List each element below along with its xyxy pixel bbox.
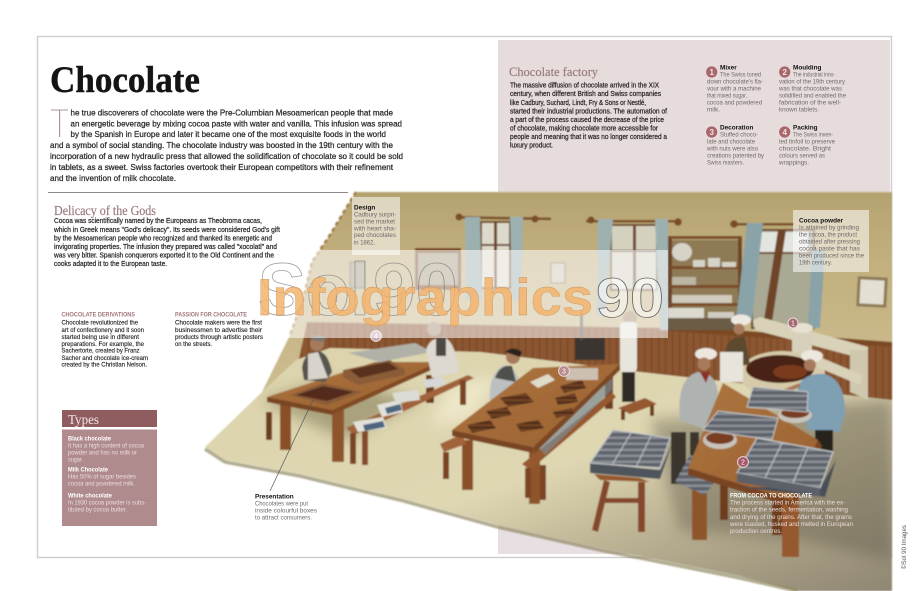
text block: passion for chocolate: products through artistic posters — [175, 334, 263, 341]
illustration: chocolate factory scene — [205, 192, 892, 591]
callout: cocoa powder: cocoa paste that has — [799, 246, 860, 252]
centre worktable — [440, 364, 620, 504]
watermark veil — [258, 250, 668, 338]
text block: passion for chocolate: businessmen to advertise their — [175, 327, 263, 334]
callout: from cocoa to chocolate: traction of the seeds, fermentation, washing — [730, 506, 848, 514]
left worktable — [266, 343, 438, 462]
watermark text: Sol — [258, 248, 370, 331]
text block: chocolate derivations: CHOCOLATE DERIVATIONS — [62, 311, 136, 318]
step 2: moulding: fabrication of the well- — [779, 99, 841, 106]
step 4: packing: 4 — [782, 128, 787, 137]
text block: chocolate factory: people and meaning that it was no longer considered a — [510, 132, 667, 141]
wall torn edge — [290, 192, 356, 335]
moulding worker three — [490, 348, 522, 402]
callout: cocoa powder: obtained after pressing — [799, 238, 860, 246]
man in blue apron — [775, 350, 845, 452]
heading: types: Types — [68, 413, 99, 428]
mixer machine — [739, 317, 868, 400]
text block: delicacy of the gods: cooks adapted it to the European taste. — [54, 259, 167, 268]
marker 2: 2 — [741, 460, 745, 466]
text block: delicacy of the gods: Cocoa was scientifically named by the Europeans as Theobroma cacas, — [54, 216, 262, 225]
press on table — [575, 310, 605, 360]
callout: presentation with leader line: to attract consumers. — [255, 514, 312, 522]
marker 3: 3 — [562, 368, 566, 376]
step 4: packing: The Swiss inven- — [793, 132, 833, 138]
step 1: mixer: that mixed sugar, — [707, 92, 747, 99]
step 2: moulding: The industrial inno- — [793, 72, 835, 78]
callout: presentation with leader line: Presentation — [255, 494, 294, 500]
step 4: packing — [778, 124, 835, 166]
panel: chocolate factory background — [498, 40, 890, 192]
intro text block — [50, 108, 403, 183]
bright floor patch — [433, 376, 492, 426]
panel: types: In 1930 cocoa powder is subs- — [68, 499, 146, 506]
panel: types — [62, 410, 157, 526]
step 2: moulding: vation of the 19th century — [779, 78, 846, 86]
callout: presentation with leader line: Chocolates were put — [255, 500, 308, 508]
panel: types: cocoa and powdered milk. — [68, 480, 135, 487]
standing man in grey — [671, 348, 718, 484]
intro text block: and the invention of milk chocolate. — [50, 174, 176, 183]
text block: chocolate factory: started their industrial productions. The automation of — [510, 106, 667, 115]
text block: chocolate factory: of chocolate, making chocolate more accessible for — [510, 124, 659, 132]
intro text block: an energetic beverage by mixing cocoa paste with water and vanilla. This infusion was spread — [70, 119, 402, 128]
wainscot — [296, 322, 892, 402]
step 4: packing: colours served as — [779, 152, 825, 159]
step 1: mixer — [706, 64, 763, 113]
right worktable with moulds — [675, 383, 836, 557]
callout: from cocoa to chocolate — [729, 492, 853, 535]
panel: types: sugar. — [68, 456, 83, 463]
panel: types: Has 50% of sugar besides — [68, 473, 136, 480]
text block: delicacy of the gods: was very bitter. Spanish conquerors exported it to the Old Continent and the — [53, 250, 274, 260]
packing worker one — [302, 335, 332, 382]
intro text block: and a symbol of social standing. The chocolate industry was boosted in the 19th century with the — [50, 141, 393, 150]
step 3: decoration — [706, 124, 765, 166]
step 3: decoration: late and chocolate — [707, 138, 755, 146]
wooden rail — [668, 325, 892, 347]
title: Chocolate — [50, 60, 200, 101]
text block: passion for chocolate — [175, 311, 263, 348]
text block: chocolate factory: like Cadbury, Suchard, Lindt, Fry & Sons or Nestlé, — [510, 98, 646, 107]
text block: delicacy of the gods: by the Mesoamerican people who recognized and thanked its energetic and — [54, 234, 272, 242]
step 4: packing: ted tinfoil to preserve — [779, 138, 835, 146]
callout: cocoa powder: 19th century. — [799, 260, 832, 266]
marker 1 — [788, 318, 798, 328]
text block: chocolate factory: luxury product. — [510, 141, 553, 150]
tray of chocolate — [703, 431, 737, 449]
step 2: moulding: was that chocolate was — [778, 86, 842, 92]
callout: design: in 1862. — [354, 240, 375, 246]
callout: cocoa powder: Is attained by grinding — [799, 224, 859, 232]
callout: design — [352, 197, 400, 255]
floor slab edge — [205, 449, 797, 591]
step 1: mixer: 1 — [709, 68, 714, 77]
step 2: moulding: solidified and enabled the — [779, 92, 846, 99]
watermark text: Infographics — [257, 269, 593, 327]
standing worker at back — [620, 311, 637, 402]
callout: cocoa powder: been produced since the — [799, 252, 864, 260]
bench with boxes — [346, 375, 474, 465]
step 2: moulding — [778, 64, 846, 113]
intro text block: he true discoverers of chocolate were the Pre-Columbian Mesoamerican people that made — [70, 108, 393, 118]
panel: types: tituted by cocoa butter. — [68, 506, 127, 513]
step 2: moulding: known tablets. — [779, 106, 819, 113]
callout: cocoa powder: Cocoa powder — [799, 218, 844, 224]
step 1: mixer: Mixer — [720, 64, 737, 72]
panel: lower pink background — [498, 515, 890, 554]
text block: passion for chocolate: on the streets. — [175, 341, 212, 348]
step 1: mixer: The Swiss toned — [720, 72, 761, 78]
callout: from cocoa to chocolate: The process started in America with the ex- — [730, 500, 845, 506]
callout: presentation with leader line: inside colourful boxes — [255, 508, 317, 514]
text block: chocolate derivations: Sacher and chocolate ice-cream — [62, 355, 148, 362]
step 1: mixer: vour with a machine — [707, 86, 761, 92]
drop cap — [51, 110, 68, 137]
pictures on wall — [350, 248, 565, 290]
step 1: mixer: cocoa and powdered — [707, 99, 762, 106]
panel: types: White chocolate — [68, 492, 112, 499]
marker 2 — [738, 457, 748, 467]
small stool — [618, 398, 657, 420]
panel: types: powder and has no milk or — [68, 449, 138, 456]
callout: presentation with leader line — [255, 400, 317, 522]
callout: design: Design — [354, 204, 375, 212]
step 2: moulding: Moulding — [793, 64, 821, 72]
callout: design: with heart sha- — [353, 226, 396, 232]
text block: delicacy of the gods — [53, 216, 280, 268]
callout: from cocoa to chocolate: and drying of the grains. After that, the grains — [730, 514, 852, 521]
floor right shading — [650, 400, 892, 560]
step 3: decoration: 3 — [709, 128, 714, 137]
scene markers — [371, 318, 798, 467]
step 1: mixer: down chocolate's fla- — [707, 78, 763, 86]
callout: from cocoa to chocolate: FROM COCOA TO CHOCOLATE — [730, 492, 813, 500]
panel: types: Black chocolate — [68, 436, 111, 442]
step 3: decoration: Decoration — [720, 124, 753, 132]
callout: design: sed the market — [354, 218, 395, 226]
step 3: decoration: Swiss masters. — [707, 159, 744, 166]
marker 3 — [559, 366, 569, 376]
stool with stack of moulds — [590, 430, 672, 532]
text block: chocolate derivations: preparations. For example, the — [62, 341, 144, 348]
callout: design: ped chocolates — [354, 232, 396, 239]
left window — [456, 214, 551, 300]
intro text block: incorporation of a new hydraulic press that allowed the solidification of chocolate so it could be sold — [50, 152, 403, 161]
step 3: decoration: creations patented by — [707, 152, 765, 159]
right window and curtains — [674, 218, 825, 328]
calendar on wall — [856, 276, 888, 308]
watermark text: 90 — [596, 266, 664, 329]
marker 1: 1 — [791, 320, 795, 328]
watermark text: 90 — [373, 248, 458, 331]
shade under left table — [262, 380, 420, 440]
heading: chocolate factory: Chocolate factory — [509, 64, 598, 79]
marker 4 — [371, 331, 381, 341]
text block: delicacy of the gods: invigorating properties. The infusion they prepared was called "xocolatl" and — [54, 242, 277, 251]
step 2: moulding: 2 — [782, 68, 787, 77]
panel: types: It has a high content of cocoa — [68, 442, 144, 449]
step 3: decoration: with nuts were also — [706, 146, 758, 152]
floor — [205, 348, 892, 591]
text block: delicacy of the gods: which in Greek means "God's delicacy". Its seeds were considered God's gift — [53, 225, 280, 234]
text block: chocolate factory: a part of the process caused the decrease of the price — [510, 115, 664, 124]
heading: delicacy of the gods: Delicacy of the Gods — [54, 203, 156, 218]
callout: cocoa powder — [793, 210, 869, 272]
marker 4: 4 — [374, 334, 378, 340]
text block: chocolate factory — [510, 80, 667, 150]
text block: chocolate derivations: Sachertorte, created by Franz — [62, 348, 140, 354]
text block: chocolate derivations: created by the Christian Nelson. — [62, 362, 147, 368]
step 4: packing: Packing — [793, 124, 818, 132]
text block: passion for chocolate: Chocolate makers were the first — [175, 320, 262, 326]
mould middle — [703, 411, 778, 440]
text block: chocolate factory: The massive diffusion of chocolate arrived in the XIX — [510, 80, 659, 90]
intro text block: by the Spanish in Europe and later it became one of the most exquisite foods in the world — [70, 130, 386, 139]
text block: chocolate derivations: art of confectionery and it soon — [62, 327, 144, 334]
mould big — [737, 460, 836, 497]
callout: design: Cadbury surpri- — [354, 212, 396, 218]
text block: passion for chocolate: PASSION FOR CHOCOLATE — [175, 311, 248, 318]
text block: chocolate derivations: Chocolate revolutionized the — [62, 320, 138, 326]
middle window — [586, 216, 681, 330]
step 4: packing: chocolate. Bright — [779, 146, 831, 152]
shelves with crockery — [668, 236, 742, 331]
mould back — [747, 387, 808, 412]
callout: from cocoa to chocolate: were toasted, husked and melted in European — [729, 521, 853, 528]
panel: types: Milk Chocolate — [68, 466, 108, 473]
step 1: mixer: milk. — [707, 106, 720, 113]
text block: chocolate derivations: started being use in different — [62, 334, 139, 341]
text block: chocolate factory: century, when different British and Swiss companies — [510, 89, 661, 98]
image credit: ©Sol 90 Images — [900, 524, 908, 569]
worker at mixer — [720, 314, 751, 382]
callout: from cocoa to chocolate: production centres. — [730, 528, 782, 535]
callout: cocoa powder: the cocoa, the product — [799, 232, 857, 238]
step 3: decoration: Stuffed choco- — [720, 132, 758, 138]
packing worker two — [426, 322, 459, 378]
watermark text — [257, 248, 664, 331]
intro text block: in tablets, as a sweet. Swiss factories overtook their European competitors with their refinement — [50, 163, 394, 172]
factory wall — [262, 192, 892, 400]
text block: chocolate derivations — [62, 311, 148, 368]
step 4: packing: wrappings. — [778, 159, 809, 166]
